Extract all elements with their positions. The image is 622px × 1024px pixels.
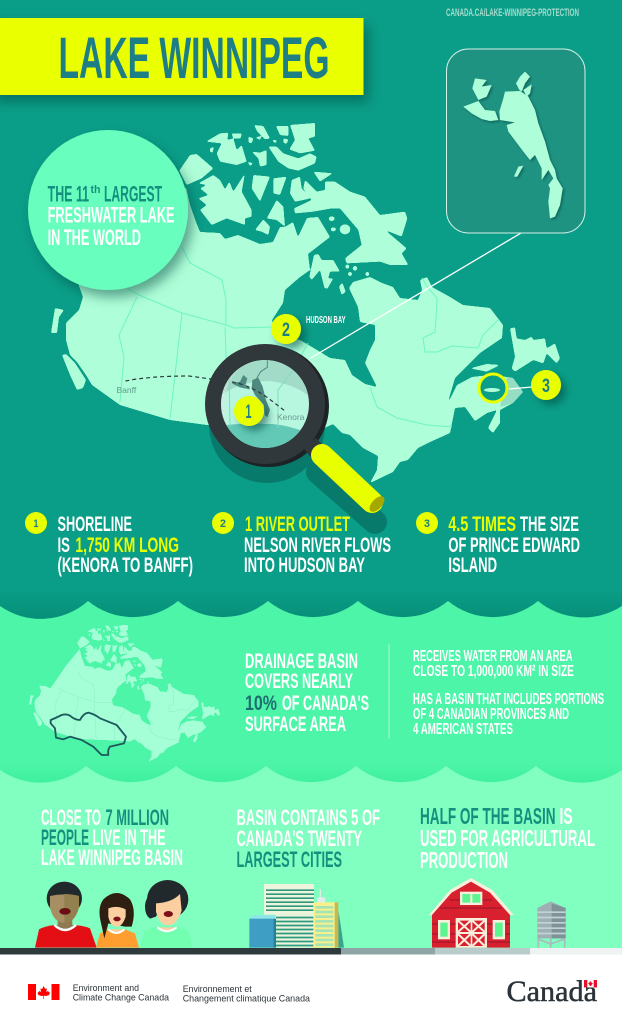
department name French — [183, 984, 311, 1004]
Canada wordmark: Canada — [506, 975, 597, 1008]
fact 3: size comparison: 3 — [424, 518, 430, 530]
department name French: Changement climatique Canada — [183, 994, 311, 1004]
basin details — [413, 648, 604, 738]
marker 1 — [234, 396, 264, 426]
title banner — [0, 18, 364, 95]
population statement: 7 MILLION — [106, 805, 169, 830]
drainage basin statement: COVERS NEARLY — [245, 669, 353, 693]
fact 1: shoreline: 1 — [34, 518, 38, 530]
handle — [322, 455, 372, 502]
band: top teal scallops — [0, 0, 622, 619]
magnifying glass — [205, 343, 387, 522]
drainage basin statement: SURFACE AREA — [245, 712, 346, 736]
icon: three people — [35, 880, 193, 948]
callout circle: 11th largest: th — [90, 184, 101, 196]
cities statement — [236, 805, 380, 872]
agriculture statement: PRODUCTION — [420, 847, 508, 873]
marker 2 and Hudson Bay label: 2 — [282, 320, 290, 341]
fact 2: river outlet: INTO HUDSON BAY — [244, 553, 365, 577]
map of Canada — [51, 123, 560, 483]
drainage basin statement: OF CANADA'S — [282, 691, 369, 715]
callout circle: 11th largest: FRESHWATER LAKE — [48, 203, 175, 228]
population statement: LIVE IN THE — [92, 825, 166, 850]
Canadian flag symbol — [28, 984, 60, 1000]
population statement: CLOSE TO — [41, 805, 101, 830]
divider — [388, 644, 390, 739]
drainage basin statement: 10% — [245, 691, 277, 715]
department name French: Environnement et — [183, 984, 252, 995]
callout circle: 11th largest — [28, 130, 188, 290]
cities statement: CANADA'S TWENTY — [236, 826, 362, 851]
lens view — [221, 360, 309, 448]
fact 1: shoreline: SHORELINE — [58, 512, 132, 536]
drainage basin statement: DRAINAGE BASIN — [245, 649, 358, 673]
fact 2: river outlet: 2 — [220, 518, 226, 530]
Banff label and route: Banff — [116, 385, 137, 395]
magnifier shadow — [209, 367, 375, 522]
fact 3: size comparison: 4.5 TIMES — [448, 512, 516, 536]
ground strip — [0, 948, 622, 954]
fact 1: shoreline: (KENORA TO BANFF) — [58, 553, 193, 577]
icon: city buildings — [249, 884, 344, 948]
agriculture statement — [420, 803, 595, 873]
fact 1: shoreline: IS — [58, 533, 70, 557]
marker 1: 1 — [246, 402, 252, 423]
fact 1: shoreline: 1,750 KM LONG — [75, 533, 179, 557]
mini map with drainage basin outline — [29, 625, 220, 762]
department name English — [73, 983, 170, 1004]
callout circle: 11th largest: IN THE WORLD — [48, 225, 141, 250]
marker 3 with ring around Prince Edward Island — [479, 370, 561, 407]
department name English: Environment and — [73, 983, 139, 994]
title banner: LAKE WINNIPEG — [58, 26, 330, 91]
fact 2: river outlet: NELSON RIVER FLOWS — [244, 533, 391, 557]
fact 2: river outlet — [212, 512, 391, 577]
department name English: Climate Change Canada — [73, 992, 170, 1004]
population statement: LAKE WINNIPEG BASIN — [41, 845, 183, 870]
cities statement: BASIN CONTAINS 5 OF — [236, 805, 380, 830]
basin details: 4 AMERICAN STATES — [413, 721, 513, 738]
connector line from lens to inset — [309, 233, 521, 359]
Banff label and route — [116, 376, 211, 395]
population statement: PEOPLE — [41, 825, 89, 850]
fact 3: size comparison — [416, 512, 580, 577]
lens view: Kenora — [277, 412, 305, 422]
handle neck — [303, 438, 328, 462]
marker 2 and Hudson Bay label: HUDSON BAY — [306, 314, 346, 326]
fact 3: size comparison: THE SIZE — [520, 512, 579, 536]
cities statement: LARGEST CITIES — [236, 847, 342, 872]
population statement — [41, 805, 183, 870]
inset panel: lake outline — [446, 49, 585, 233]
fact 1: shoreline — [25, 512, 193, 577]
drainage basin statement — [245, 649, 369, 736]
icon: red barn and silo — [429, 878, 566, 948]
band: drainage basin background — [0, 590, 622, 783]
callout circle: 11th largest: LARGEST — [104, 182, 162, 206]
fact 3: size comparison: ISLAND — [448, 553, 497, 577]
agriculture statement: IS — [560, 803, 572, 829]
fact 2: river outlet: 1 RIVER OUTLET — [245, 512, 350, 536]
marker 3 with ring around Prince Edward Island: 3 — [542, 376, 550, 397]
marker 2 and Hudson Bay label — [271, 314, 346, 344]
callout circle: 11th largest: THE 11 — [48, 182, 89, 206]
